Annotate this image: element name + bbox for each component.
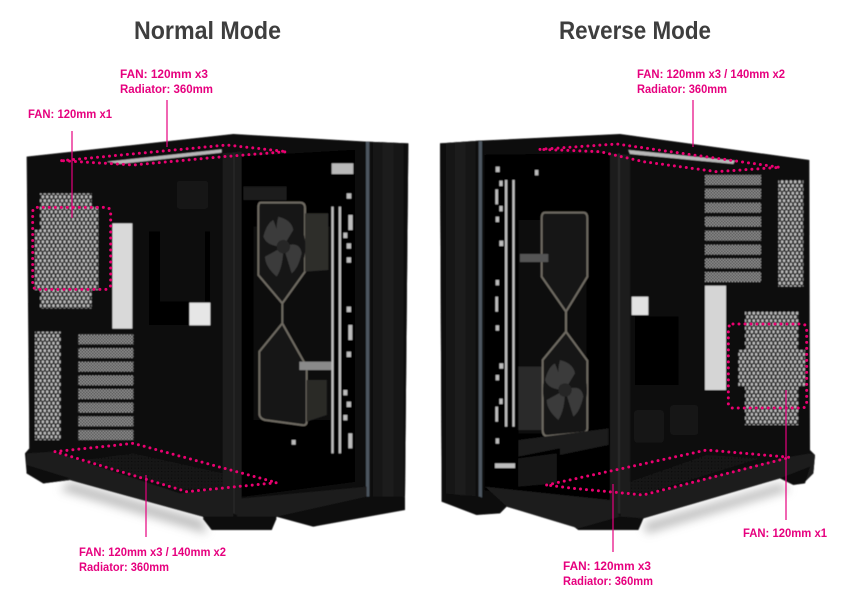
fan: [261, 212, 305, 281]
callout: normal bottom: Radiator: 360mm: [79, 560, 169, 574]
callout: normal fan: [28, 107, 112, 218]
cutout: [630, 295, 690, 390]
back panel: [630, 163, 807, 473]
front bay: [242, 150, 355, 497]
perforated fan mount: [35, 193, 98, 308]
corner pillar: [610, 153, 630, 517]
chassis body: [440, 134, 815, 530]
left panel: [440, 141, 480, 497]
top bright strip: [628, 150, 735, 164]
bottom vent: [83, 453, 223, 490]
cutout: [149, 232, 210, 325]
dotted zone: top: [540, 144, 780, 172]
callout: reverse fan: FAN: 120mm x1: [743, 526, 827, 540]
callout: reverse bottom: FAN: 120mm x3: [563, 559, 651, 573]
graphics card: [518, 213, 587, 436]
feet: [780, 467, 810, 485]
expansion slots: [705, 175, 761, 282]
dotted zone: top: [62, 145, 287, 165]
dotted zone: fan: [728, 324, 807, 408]
front bay: [485, 153, 610, 512]
callout: normal bottom: FAN: 120mm x3 / 140mm x2: [79, 545, 226, 559]
bottom plate: [620, 453, 815, 518]
callout: normal top: Radiator: 360mm: [120, 82, 213, 96]
corner pillar: [223, 152, 242, 517]
callout: reverse top: Radiator: 360mm: [637, 82, 727, 96]
top bright strip: [107, 149, 222, 164]
perforated side strip: [778, 180, 803, 287]
support frame: [518, 428, 608, 457]
dotted zone: bottom: [55, 443, 277, 492]
front foot and I/O: [237, 487, 367, 527]
fan: [543, 355, 587, 425]
callout: reverse top: [637, 67, 785, 147]
callout: reverse top: FAN: 120mm x3 / 140mm x2: [637, 67, 785, 81]
cable grommets: [634, 410, 664, 443]
callout: normal bottom: [79, 475, 226, 574]
graphics card: [253, 203, 333, 425]
callout: reverse bottom: [563, 484, 653, 588]
bottom plate: [27, 452, 233, 517]
window: [705, 286, 726, 390]
rear rails: [495, 167, 538, 468]
callout: reverse bottom: Radiator: 360mm: [563, 574, 653, 588]
callout: normal top: [120, 67, 213, 147]
case: normal mode: [25, 134, 408, 533]
chassis body: [25, 134, 408, 530]
bracket: [520, 254, 548, 262]
bottom vent: [630, 455, 760, 493]
expansion slots: [78, 334, 133, 440]
callout: normal top: FAN: 120mm x3: [120, 67, 208, 81]
title: Reverse Mode: Reverse Mode: [559, 17, 711, 45]
cable grommets: [140, 183, 170, 210]
right panel: [367, 142, 408, 497]
case: reverse mode: [440, 134, 815, 533]
front foot and I/O: [485, 487, 620, 528]
feet: [27, 465, 70, 483]
dotted zone: bottom: [547, 450, 790, 495]
callout: normal fan: FAN: 120mm x1: [28, 107, 112, 121]
floor shadow: [643, 483, 790, 533]
motherboard tray window: [112, 223, 132, 329]
perforated side strip: [35, 332, 61, 440]
bracket: [299, 362, 333, 370]
floor shadow: [60, 482, 207, 533]
dotted zone: fan: [33, 207, 111, 289]
title: Normal Mode: Normal Mode: [134, 17, 281, 45]
perforated fan mount: [738, 312, 805, 425]
rear rails: [292, 193, 353, 453]
back panel: [29, 153, 223, 468]
